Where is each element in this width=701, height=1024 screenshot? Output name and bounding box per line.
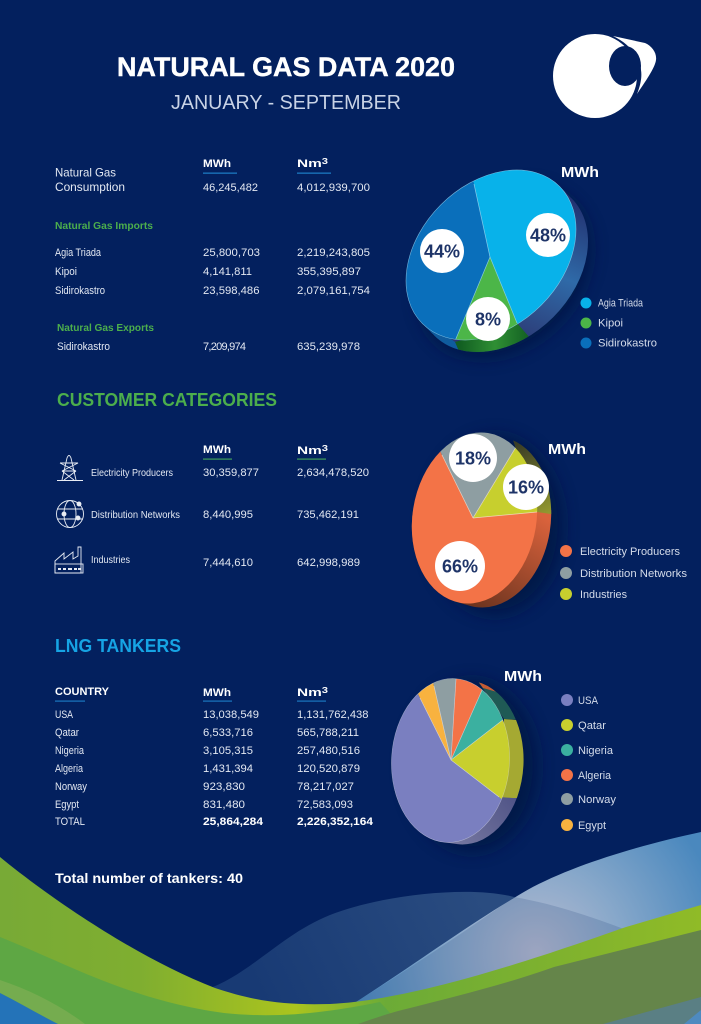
label 66% [435, 541, 485, 591]
row: Egypt: 831,480 [203, 799, 245, 811]
row: Kipoi: Kipoi [55, 266, 77, 278]
row: Agia Triada: 25,800,703 [203, 247, 260, 259]
legend: LNG origin countries: Algeria [578, 770, 612, 782]
row: Industries: Industries [91, 554, 130, 566]
row: Sidirokastro exports: Sidirokastro [57, 341, 110, 353]
row: Electricity Producers: Electricity Producers [91, 467, 173, 479]
row: total: TOTAL [55, 816, 85, 828]
pie top [391, 678, 510, 842]
label 8% [466, 297, 510, 341]
icon: factory [55, 547, 83, 573]
subheading: natural gas imports: Natural Gas Imports [55, 221, 153, 232]
row: Kipoi [55, 266, 361, 278]
heading: customer categories: CUSTOMER CATEGORIES [57, 390, 277, 410]
row: Agia Triada [55, 247, 370, 259]
row label: natural gas consumption: Consumption [55, 180, 125, 194]
legend: LNG origin countries: Nigeria [578, 745, 614, 757]
row: total [55, 816, 374, 828]
pie top [412, 432, 538, 604]
row: Qatar: 565,788,211 [297, 727, 359, 739]
row: Sidirokastro imports: 2,079,161,754 [297, 285, 370, 297]
row: Nigeria: Nigeria [55, 745, 85, 757]
row: Agia Triada: 2,219,243,805 [297, 247, 370, 259]
label 16% [503, 464, 549, 510]
row: USA: 1,131,762,438 [297, 709, 368, 721]
column header: country: COUNTRY [55, 686, 110, 698]
row: Egypt: 72,583,093 [297, 799, 353, 811]
row: Agia Triada: Agia Triada [55, 247, 102, 259]
subheading: natural gas exports: Natural Gas Exports [57, 323, 154, 334]
row: USA: 13,038,549 [203, 709, 259, 721]
chart unit label: MWh [561, 164, 599, 181]
column header: MWh: MWh [203, 158, 231, 170]
label 44%: 44% [424, 242, 460, 262]
logo [553, 34, 656, 118]
subtitle: JANUARY - SEPTEMBER [171, 92, 401, 114]
row: Electricity Producers [91, 467, 369, 479]
column header: Nm3: 3 [322, 444, 329, 453]
row: Industries: 7,444,610 [203, 557, 253, 569]
legend: LNG origin countries [561, 694, 616, 832]
legend: entry points [580, 298, 657, 350]
panel: customer categories table [55, 444, 369, 573]
row: Electricity Producers: 2,634,478,520 [297, 467, 369, 479]
row: Distribution Networks: 735,462,191 [297, 509, 359, 521]
consumption values: 4,012,939,700 [297, 182, 370, 194]
legend: customer categories [560, 545, 688, 601]
row: Norway [55, 781, 354, 793]
label 66%: 66% [442, 556, 478, 576]
row: Kipoi: 4,141,811 [203, 266, 252, 278]
pie chart: customer categories [412, 432, 565, 617]
chart unit label: MWh [548, 441, 586, 458]
pie chart: entry points [406, 170, 594, 360]
consumption values [203, 182, 370, 194]
column header: Nm3: 3 [322, 157, 329, 166]
column header: MWh: MWh [203, 687, 231, 699]
pie side [394, 682, 524, 844]
row: Algeria: 120,520,879 [297, 763, 360, 775]
label 18%: 18% [455, 448, 491, 468]
row: USA: USA [55, 709, 74, 721]
legend: entry points: Sidirokastro [598, 338, 657, 350]
row: Qatar: Qatar [55, 727, 79, 739]
row: total: 25,864,284 [203, 816, 264, 828]
total number of tankers: Total number of tankers: 40 [55, 870, 243, 886]
label 16%: 16% [508, 478, 544, 498]
icon: globe network [56, 500, 84, 528]
label 48% [526, 213, 570, 257]
row: Electricity Producers: 30,359,877 [203, 467, 259, 479]
pie side [425, 182, 588, 352]
row: Industries [91, 554, 360, 569]
decorative wave footer [0, 832, 701, 1024]
pie chart: LNG tankers [391, 678, 540, 854]
pie top [406, 170, 576, 340]
legend: LNG origin countries: Egypt [578, 820, 606, 832]
chart unit label: MWh [504, 668, 542, 685]
row: Algeria: 1,431,394 [203, 763, 253, 775]
column header: MWh: MWh [203, 444, 231, 456]
row: Egypt: Egypt [55, 799, 79, 811]
panel: gas consumption, imports and exports table [55, 157, 370, 353]
row: Norway: Norway [55, 781, 87, 793]
row: Distribution Networks: 8,440,995 [203, 509, 253, 521]
row: Sidirokastro imports [55, 285, 370, 297]
row: Algeria [55, 763, 360, 775]
row: Qatar [55, 727, 359, 739]
row: total: 2,226,352,164 [297, 816, 374, 828]
row: Sidirokastro exports: 635,239,978 [297, 341, 360, 353]
label 48%: 48% [530, 226, 566, 246]
row: Norway: 78,217,027 [297, 781, 354, 793]
legend: LNG origin countries: Norway [578, 794, 616, 806]
column header: Nm3: Nm [297, 158, 315, 170]
row: Algeria: Algeria [55, 763, 84, 775]
row label: natural gas consumption: Natural Gas [55, 166, 116, 180]
icon: transmission tower [57, 456, 83, 480]
column header: Nm3: 3 [322, 686, 329, 695]
legend: LNG origin countries: Qatar [578, 720, 606, 732]
row: Nigeria: 3,105,315 [203, 745, 253, 757]
row label: natural gas consumption [55, 166, 125, 194]
legend: entry points: Kipoi [598, 318, 623, 330]
consumption values: 46,245,482 [203, 182, 258, 194]
row: Distribution Networks: Distribution Networks [91, 509, 180, 521]
title: NATURAL GAS DATA 2020 [117, 52, 455, 82]
row: Qatar: 6,533,716 [203, 727, 253, 739]
legend: LNG origin countries: USA [578, 695, 599, 707]
panel: LNG tankers table [55, 686, 374, 828]
column header: Nm3: Nm [297, 445, 315, 457]
row: Distribution Networks [91, 509, 359, 521]
row: Sidirokastro exports: 7,209,974 [203, 341, 246, 353]
row: Kipoi: 355,395,897 [297, 266, 361, 278]
heading: LNG tankers: LNG TANKERS [55, 636, 181, 656]
row: Norway: 923,830 [203, 781, 245, 793]
row: Nigeria: 257,480,516 [297, 745, 360, 757]
row: Sidirokastro exports [57, 341, 360, 353]
row: Sidirokastro imports: Sidirokastro [55, 285, 105, 297]
legend: entry points: Agia Triada [598, 298, 644, 310]
label 44% [420, 229, 464, 273]
pie side [412, 440, 552, 608]
row: USA [55, 709, 368, 721]
column header: Nm3: Nm [297, 687, 315, 699]
row: Sidirokastro imports: 23,598,486 [203, 285, 260, 297]
row: Industries: 642,998,989 [297, 557, 360, 569]
legend: customer categories: Industries [580, 589, 627, 601]
label 18% [449, 434, 497, 482]
label 8%: 8% [475, 310, 501, 330]
row: Egypt [55, 799, 353, 811]
legend: customer categories: Electricity Producers [580, 546, 680, 558]
row: Nigeria [55, 745, 360, 757]
legend: customer categories: Distribution Networks [580, 568, 688, 580]
